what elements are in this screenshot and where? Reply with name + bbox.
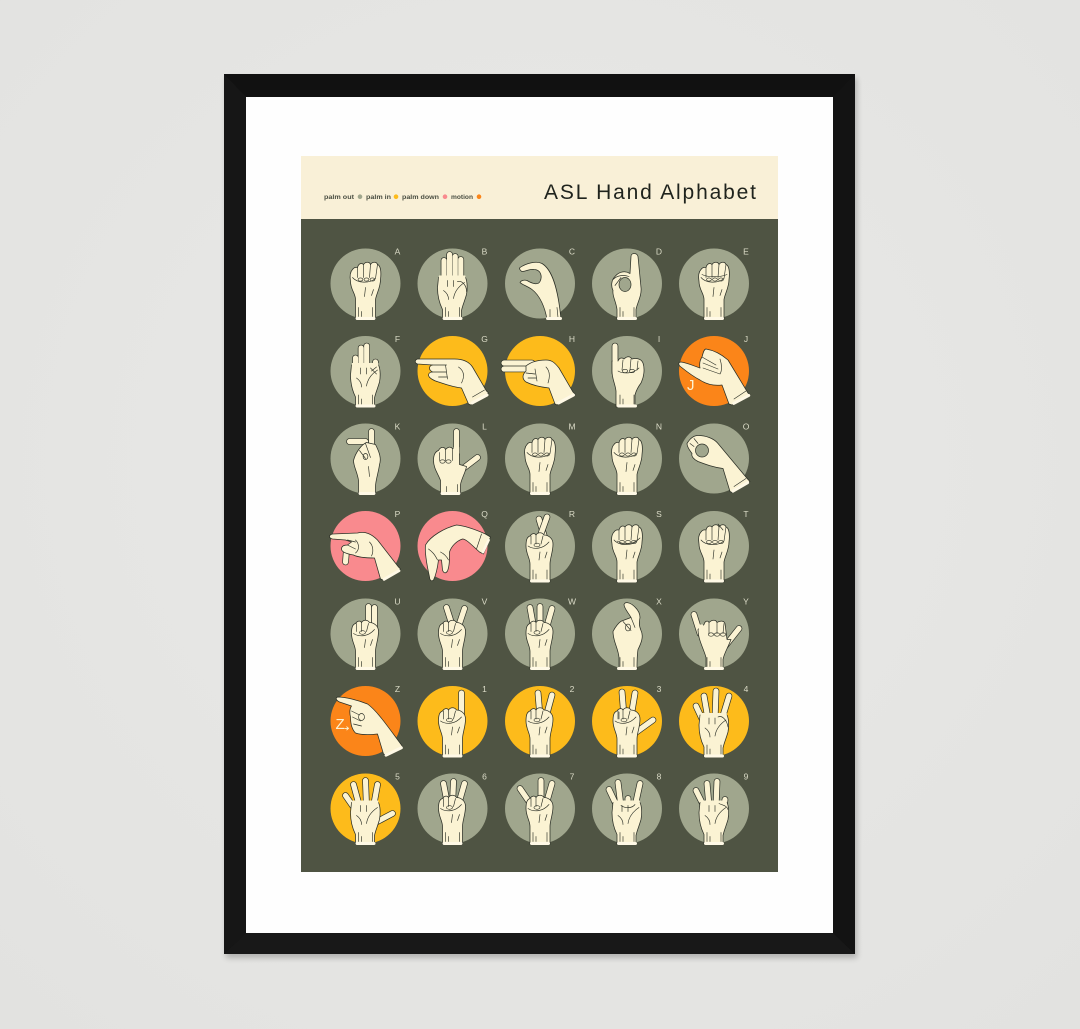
sign E: E	[743, 246, 749, 256]
sign W: W	[568, 596, 576, 606]
sign 1	[418, 684, 488, 758]
sign T	[679, 509, 749, 582]
header band	[301, 156, 778, 219]
sign B	[418, 246, 488, 320]
sign 9	[679, 772, 749, 845]
sign S: S	[656, 509, 662, 519]
sign R: R	[569, 509, 575, 519]
sign F	[330, 334, 400, 408]
title: ASL Hand Alphabet	[544, 181, 756, 204]
sign I: I	[658, 334, 660, 344]
sign 2: 2	[570, 684, 575, 694]
sign W	[505, 596, 576, 670]
sign N	[592, 422, 662, 495]
white mat	[246, 97, 833, 933]
sign K	[330, 422, 401, 495]
sign H: H	[569, 334, 575, 344]
sign Z: Z	[336, 716, 345, 733]
sign K: K	[395, 422, 401, 432]
sign J	[679, 334, 751, 406]
sign I	[592, 334, 662, 408]
sign P: P	[395, 509, 401, 519]
sign X	[592, 596, 662, 670]
sign L: L	[482, 422, 487, 432]
sign Y: Y	[743, 596, 749, 606]
sign 1: 1	[482, 684, 487, 694]
sign J: J	[744, 334, 748, 344]
sign 5: 5	[395, 772, 400, 782]
sign O: O	[743, 422, 750, 432]
sign G	[415, 334, 489, 406]
sign 5	[330, 772, 400, 845]
sign 6	[418, 772, 488, 845]
sign 2	[505, 684, 575, 758]
sign 9: 9	[744, 772, 749, 782]
sign P	[330, 509, 401, 581]
poster background	[301, 219, 778, 872]
sign S	[592, 509, 662, 582]
sign X: X	[656, 596, 662, 606]
sign V	[418, 596, 488, 670]
sign 4: 4	[744, 684, 749, 694]
sign R	[505, 509, 575, 582]
legend	[324, 194, 481, 201]
sign U	[330, 596, 401, 670]
sign Z: Z	[395, 684, 400, 694]
picture frame	[224, 74, 857, 958]
sign N: N	[656, 422, 662, 432]
sign Y	[679, 596, 749, 670]
sign T: T	[743, 509, 749, 519]
sign E	[679, 246, 749, 320]
sign M	[505, 422, 576, 495]
sign Q	[418, 509, 490, 581]
legend: palm out	[324, 194, 355, 201]
sign 3	[592, 684, 662, 758]
sign B: B	[482, 246, 488, 256]
sign 8	[592, 772, 662, 845]
sign 3: 3	[657, 684, 662, 694]
sign Q: Q	[481, 509, 488, 519]
sign 6: 6	[482, 772, 487, 782]
sign H	[504, 334, 576, 406]
sign 8: 8	[657, 772, 662, 782]
sign M: M	[568, 422, 576, 432]
sign A: A	[395, 246, 401, 256]
legend: palm down	[402, 194, 439, 201]
sign G: G	[481, 334, 488, 344]
sign O	[679, 422, 750, 494]
sign C	[505, 246, 575, 320]
sign 7: 7	[570, 772, 575, 782]
sign D	[592, 246, 662, 320]
sign L	[418, 422, 488, 495]
sign J: J	[687, 377, 694, 394]
sign F: F	[395, 334, 400, 344]
sign U: U	[394, 596, 401, 606]
legend: motion	[451, 194, 473, 201]
sign C: C	[569, 246, 575, 256]
legend: palm in	[366, 194, 391, 201]
sign 4	[679, 684, 749, 758]
sign D: D	[656, 246, 662, 256]
sign 7	[505, 772, 575, 845]
sign V: V	[482, 596, 488, 606]
sign Z	[330, 684, 403, 757]
sign A	[330, 246, 401, 320]
